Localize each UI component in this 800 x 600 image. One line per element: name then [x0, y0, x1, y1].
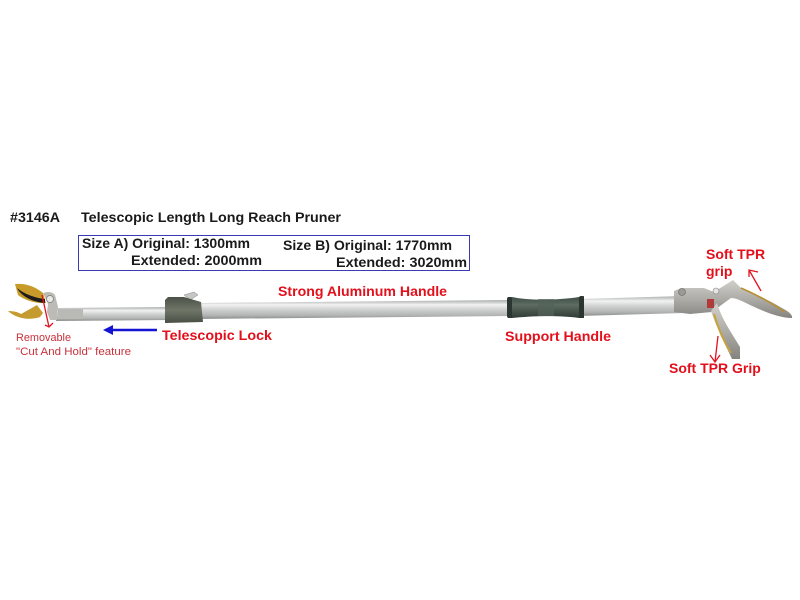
size specification box: Size B) Original: 1770mm: [283, 238, 452, 254]
size specification box: [78, 236, 470, 271]
label: removable cut and hold feature: [16, 332, 131, 358]
label: support handle: Support Handle: [505, 328, 611, 344]
cutting head: [8, 284, 58, 320]
label: removable cut and hold feature: "Cut And Hold" feature: [16, 346, 131, 358]
pruner tool: [8, 280, 792, 359]
label: soft TPR grip upper: Soft TPR: [706, 246, 765, 262]
label: soft TPR grip upper: grip: [706, 263, 732, 279]
label: soft TPR grip lower: Soft TPR Grip: [669, 360, 761, 376]
arrow: red pointer to cutting head: [42, 295, 53, 327]
support handle grip: [507, 296, 584, 318]
size specification box: Extended: 2000mm: [131, 253, 262, 269]
telescopic lock: [165, 292, 203, 323]
size specification box: Extended: 3020mm: [336, 255, 467, 271]
arrow: blue direction arrow: [103, 325, 157, 335]
label: soft TPR grip upper: [706, 246, 765, 279]
arrow: lower grip pointer: [710, 336, 720, 362]
title: #3146A: [10, 210, 60, 226]
title: Telescopic Length Long Reach Pruner: [81, 210, 341, 226]
size specification box: Size A) Original: 1300mm: [82, 236, 250, 252]
rear handle: [674, 280, 792, 359]
label: strong aluminum handle: Strong Aluminum Handle: [278, 283, 447, 299]
label: removable cut and hold feature: Removable: [16, 332, 71, 344]
label: telescopic lock: Telescopic Lock: [162, 327, 272, 343]
telescopic pole: [56, 296, 684, 321]
arrow: upper grip pointer: [749, 270, 761, 291]
